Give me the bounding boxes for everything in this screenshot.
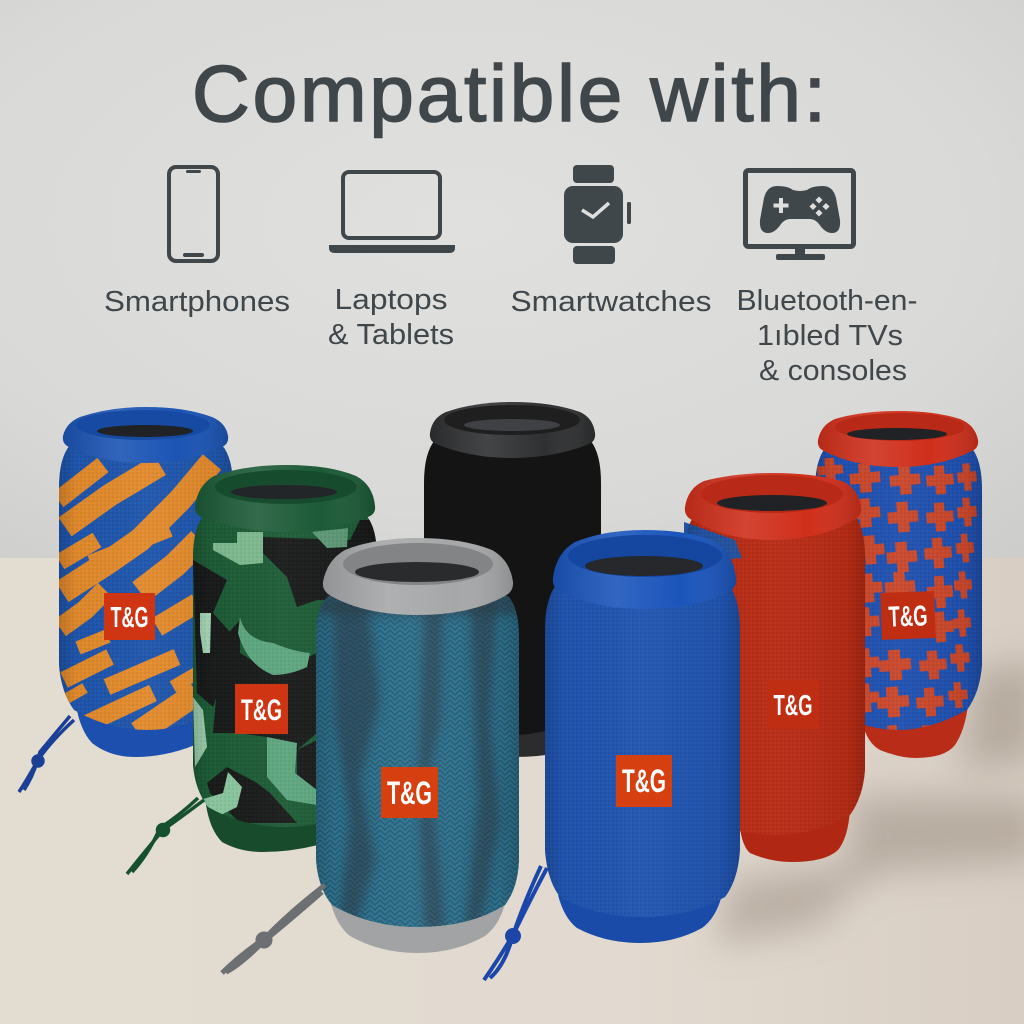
label: Laptops & Tablets: & Tablets [328,319,454,351]
label: Bluetooth-enabled TVs & consoles [736,285,918,387]
logo tag [104,593,155,640]
logo tag: T&G [110,602,148,634]
label: Bluetooth-enabled TVs & consoles: Bluetooth-en- [736,285,918,317]
lanyard [127,798,204,874]
lanyard [19,716,74,792]
label: Bluetooth-enabled TVs & consoles: 1ıbled TVs [757,320,903,352]
icon: laptop [329,172,455,253]
lanyard [222,885,325,973]
logo tag [880,591,936,640]
floor background [0,558,1024,1024]
icon: smartwatch [564,165,631,264]
logo tag [616,755,672,807]
logo tag: T&G [622,763,666,799]
logo tag: T&G [387,775,432,811]
speaker: blue-grey herringbone [222,538,520,973]
label: Bluetooth-enabled TVs & consoles: & consoles [759,355,907,387]
logo tag [381,767,438,818]
floor shadows [715,660,1024,945]
label: Smartwatches: Smartwatches [510,286,712,318]
logo tag [767,680,819,729]
icon: smartphone [169,167,218,261]
logo tag: T&G [888,600,928,634]
speaker: orange and blue zigzag [19,407,233,792]
speaker: black [424,402,601,757]
title: Compatible with: [192,49,826,138]
wall background [0,0,1024,558]
speaker: camouflage green [127,465,378,874]
label: Smartphones: Smartphones [104,286,290,318]
label: Laptops & Tablets [328,284,454,351]
logo tag: T&G [774,690,812,722]
icon: gamepad on TV [746,170,854,260]
speaker: blue [484,530,740,980]
label: Laptops & Tablets: Laptops [334,284,448,316]
speaker: plain red [684,473,865,862]
lanyard [484,866,547,980]
logo tag [235,684,288,734]
logo tag: T&G [241,694,282,727]
speaker: blue with red crosses [815,411,982,758]
